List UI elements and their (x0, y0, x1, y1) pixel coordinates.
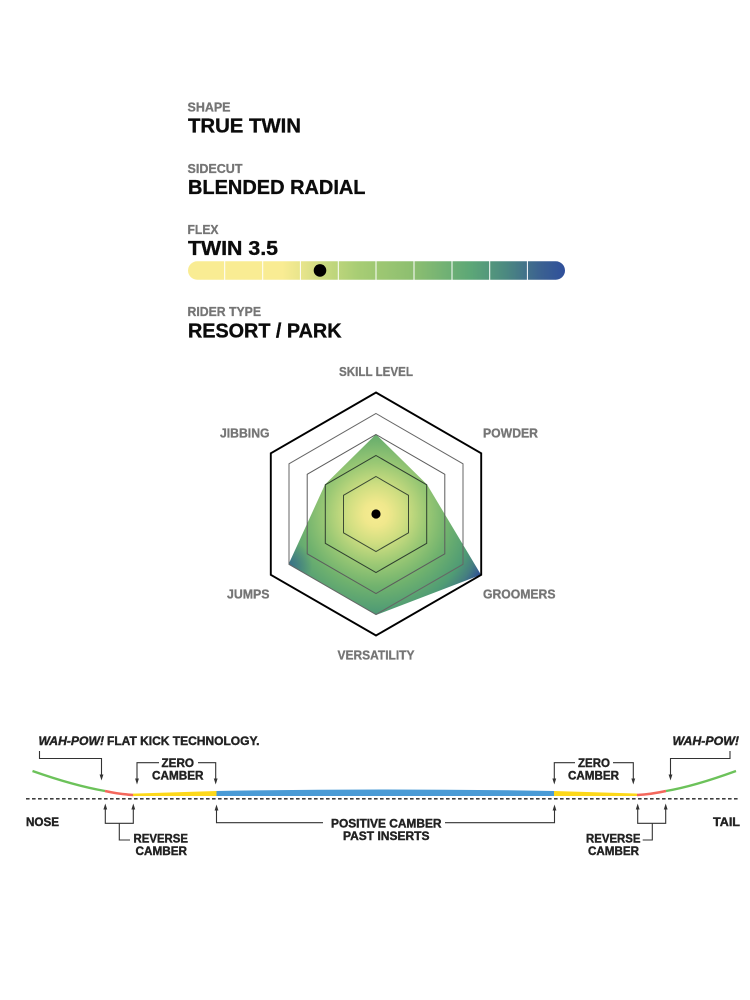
callout: reverse camber left (103, 804, 188, 858)
spec: shape: TRUE TWIN (188, 116, 301, 138)
radar axis labels: JIBBING (220, 426, 270, 440)
callout: positive camber (215, 804, 556, 843)
spec: rider type (188, 305, 342, 342)
spec: sidecut: BLENDED RADIAL (188, 177, 366, 199)
spec: flex (188, 223, 565, 280)
callout: reverse camber right: CAMBER (588, 844, 639, 858)
spec: rider type: RESORT / PARK (188, 320, 342, 342)
callout: wah-pow tail (669, 734, 739, 780)
radar axis labels: POWDER (483, 426, 538, 440)
camber line: tail red (637, 791, 666, 795)
camber line: positive camber (216, 790, 554, 796)
baseline (26, 798, 740, 800)
radar grid (271, 392, 481, 636)
camber line: tail green (666, 771, 736, 791)
callout: positive camber: PAST INSERTS (343, 829, 430, 843)
label: nose: NOSE (26, 815, 59, 829)
callout: reverse camber left: REVERSE (134, 831, 188, 845)
callout: zero camber right (552, 756, 635, 784)
callout: reverse camber right (586, 804, 668, 858)
radar chart (220, 365, 556, 663)
callout: zero camber left: CAMBER (152, 768, 204, 782)
callout: wah-pow tail: WAH-POW! (672, 734, 739, 748)
spec: sidecut: SIDECUT (188, 162, 243, 176)
flex scale bar (188, 261, 565, 280)
callout: wah-pow flat kick: WAH-POW! (38, 734, 104, 748)
callout: zero camber left (135, 756, 218, 784)
camber line: zero camber right (554, 791, 638, 796)
radar data area (288, 434, 481, 615)
radar axis labels: GROOMERS (483, 587, 556, 601)
radar axis labels (220, 365, 556, 663)
callout: wah-pow flat kick (38, 734, 260, 780)
radar axis labels: SKILL LEVEL (339, 365, 413, 379)
camber profile diagram (26, 734, 740, 858)
spec: sidecut (188, 162, 366, 199)
camber line: nose green (32, 771, 105, 791)
radar axis labels: JUMPS (227, 587, 270, 601)
radar axis labels: VERSATILITY (338, 649, 415, 663)
spec: flex: TWIN 3.5 (188, 238, 278, 260)
callout: wah-pow flat kick: FLAT KICK TECHNOLOGY. (107, 734, 260, 748)
spec: flex: FLEX (188, 223, 219, 237)
callout: reverse camber right: REVERSE (586, 831, 640, 845)
callout: zero camber right: ZERO (578, 756, 610, 770)
camber line: zero camber left (133, 791, 216, 796)
spec: shape: SHAPE (188, 100, 230, 114)
spec: rider type: RIDER TYPE (188, 305, 261, 319)
callout: zero camber left: ZERO (162, 756, 194, 770)
spec: shape (188, 100, 301, 138)
callout: zero camber right: CAMBER (568, 768, 619, 782)
label: tail: TAIL (713, 815, 740, 829)
callout: reverse camber left: CAMBER (136, 844, 187, 858)
camber line: nose red (105, 791, 134, 795)
callout: positive camber: POSITIVE CAMBER (331, 816, 442, 830)
